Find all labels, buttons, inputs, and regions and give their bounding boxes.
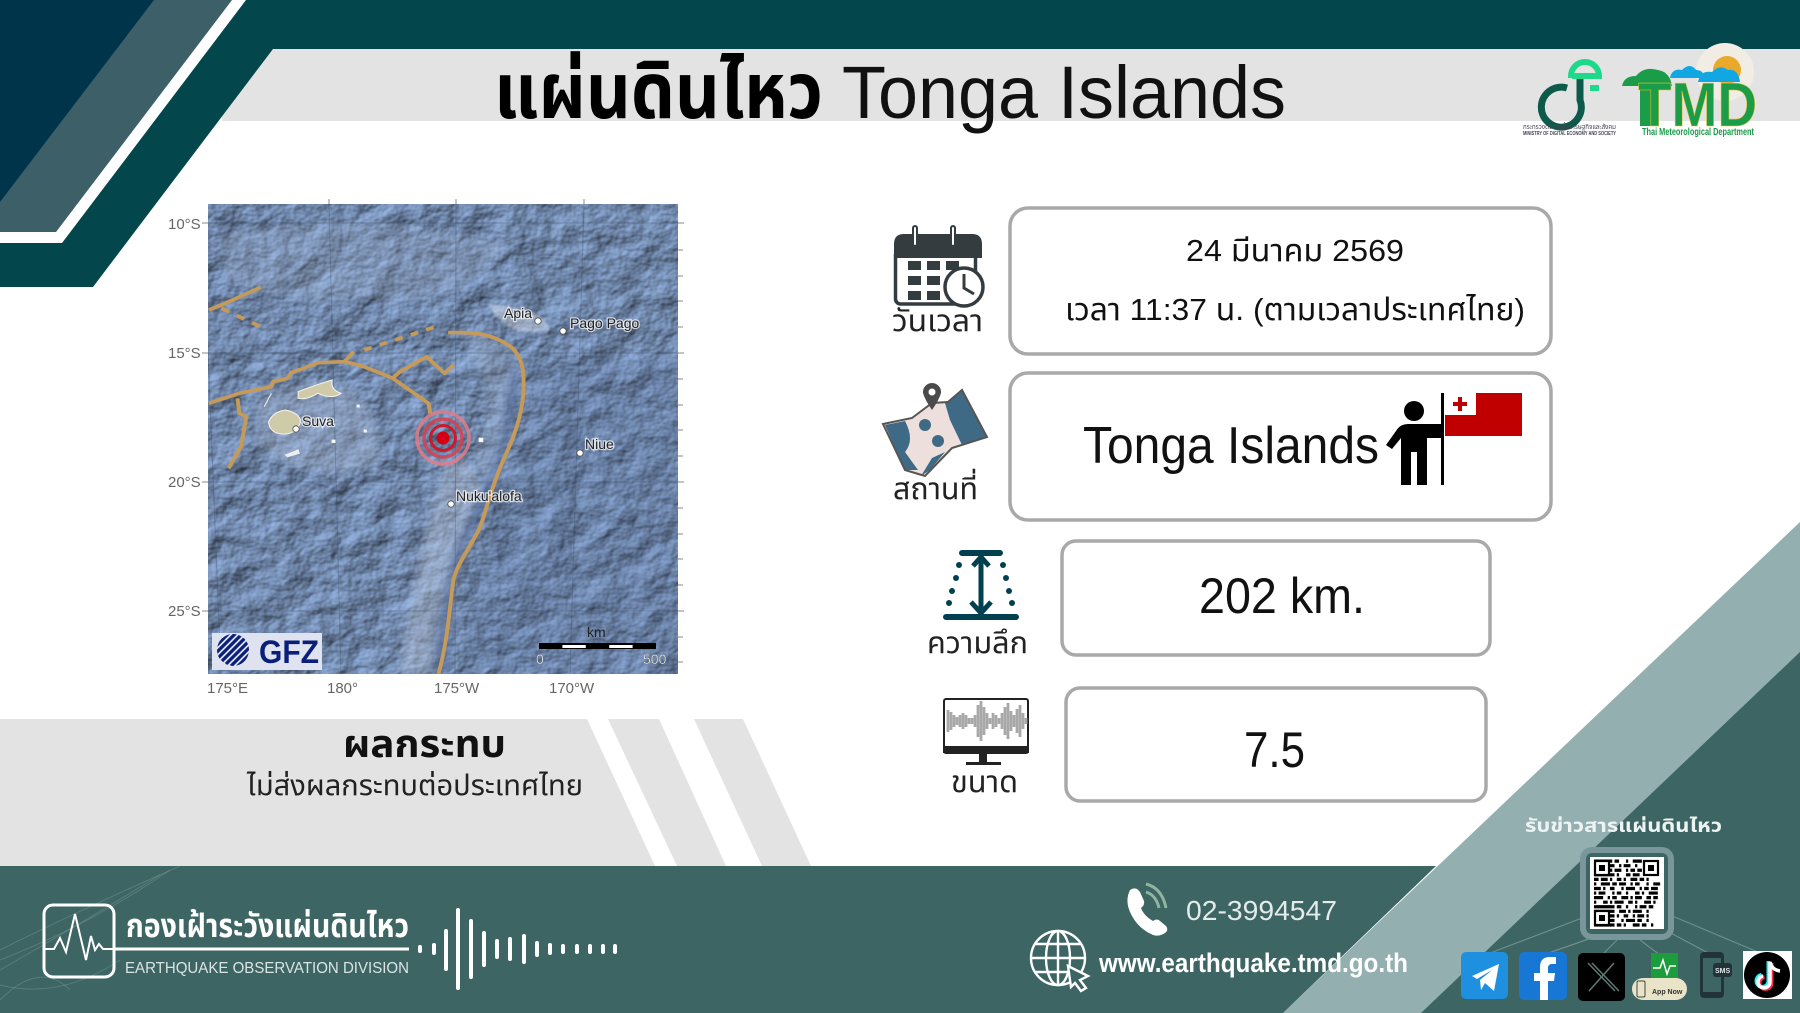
subscribe heading: รับข่าวสารแผ่นดินไหว xyxy=(1525,815,1722,837)
value box xyxy=(1066,688,1486,801)
impact text: ไม่ส่งผลกระทบต่อประเทศไทย xyxy=(246,770,583,802)
contact: phone: 02-3994547 xyxy=(1186,895,1337,926)
label: ขนาด xyxy=(951,766,1018,799)
map scale bar: km xyxy=(587,624,606,640)
icon: folded map with pin xyxy=(883,383,987,476)
city markers and names: Nuku'alofa xyxy=(456,488,522,504)
earthquake map xyxy=(168,199,684,697)
sound wave bars xyxy=(420,910,615,988)
latitude and longitude axis labels: 10°S xyxy=(168,216,201,233)
contact: website xyxy=(1031,931,1408,991)
seismograph icon xyxy=(44,905,114,977)
value box xyxy=(1062,541,1490,655)
map scale bar: 0 xyxy=(536,651,544,667)
QR code xyxy=(1580,847,1674,940)
icon: Facebook xyxy=(1519,952,1567,1000)
icon: phone xyxy=(1127,888,1167,936)
row: date and time: 24 มีนาคม 2569 xyxy=(1186,233,1404,268)
icon: earthquake app xyxy=(1632,953,1687,1000)
city markers and names: Pago Pago xyxy=(570,315,639,331)
icon: X xyxy=(1578,953,1625,1001)
city markers and names: Niue xyxy=(585,436,614,452)
right diagonal background shapes xyxy=(0,522,1800,1013)
QR finder squares xyxy=(1595,861,1658,925)
map scale bar xyxy=(536,624,667,667)
map scale bar: 500 xyxy=(643,651,667,667)
title: Tonga Islands xyxy=(842,51,1286,134)
icon: calendar with clock xyxy=(894,228,983,306)
latitude and longitude axis labels: 170°W xyxy=(549,680,595,697)
logo: ministry of digital economy: กระทรวงดิจิทัลเพื่อเศรษฐกิจและสังคม xyxy=(1523,121,1616,131)
icon: person with Tonga flag xyxy=(1386,393,1522,485)
icon: Telegram xyxy=(1461,952,1508,999)
division name: กองเฝ้าระวังแผ่นดินไหว xyxy=(126,907,409,944)
icon: depth arrow xyxy=(946,553,1016,617)
row: depth xyxy=(927,541,1490,660)
icon: SMS phone xyxy=(1700,952,1732,998)
logo: Thai Meteorological Department: Thai Meteorological Department xyxy=(1642,127,1754,138)
city markers and names xyxy=(293,305,639,507)
map frame ticks xyxy=(202,199,684,662)
latitude and longitude axis labels xyxy=(168,216,595,697)
latitude and longitude axis labels: 180° xyxy=(327,680,358,697)
latitude and longitude axis labels: 175°W xyxy=(434,680,480,697)
footer faint wave mesh xyxy=(0,866,180,1000)
latitude and longitude axis labels: 15°S xyxy=(168,345,201,362)
row: magnitude: 7.5 xyxy=(1244,722,1305,778)
logo: ministry of digital economy xyxy=(1523,62,1617,137)
logo: Thai Meteorological Department: TMD xyxy=(1638,71,1757,140)
division logo: EARTHQUAKE OBSERVATION DIVISION xyxy=(125,960,409,977)
value box xyxy=(1010,373,1551,520)
impact text: ผลกระทบ xyxy=(343,724,506,766)
icon: monitor with seismogram xyxy=(943,699,1029,765)
GFZ logo xyxy=(212,633,322,670)
header: dark teal band and slanted block xyxy=(0,0,1800,287)
icon: globe with cursor xyxy=(1031,931,1088,991)
logo: Thai Meteorological Department xyxy=(1622,43,1757,140)
label: ความลึก xyxy=(927,627,1028,660)
latitude and longitude axis labels: 20°S xyxy=(168,474,201,491)
islands xyxy=(264,380,483,457)
icon: TikTok xyxy=(1743,951,1792,999)
row: magnitude xyxy=(943,688,1486,801)
row: date and time xyxy=(892,208,1551,354)
contact: website: www.earthquake.tmd.go.th xyxy=(1098,948,1408,978)
GFZ logo: GFZ xyxy=(259,634,319,670)
icon: earthquake app: App Now xyxy=(1652,989,1683,996)
plate boundaries xyxy=(209,287,524,674)
label: วันเวลา xyxy=(892,305,983,338)
division logo xyxy=(44,905,615,988)
map base with hillshade relief xyxy=(208,204,678,674)
value box xyxy=(1010,208,1551,354)
connector lines from QR to channels xyxy=(1485,915,1765,955)
latitude and longitude axis labels: 175°E xyxy=(207,680,248,697)
city markers and names: Suva xyxy=(302,413,334,429)
title: แผ่นดินไหว xyxy=(494,47,823,135)
title xyxy=(494,47,1286,135)
epicenter marker xyxy=(417,412,469,464)
contact: phone xyxy=(1127,884,1337,936)
row: depth: 202 km. xyxy=(1199,568,1365,624)
label: สถานที่ xyxy=(893,468,978,506)
row: location: Tonga Islands xyxy=(1083,417,1379,475)
logo: ministry of digital economy: MINISTRY OF DIGITAL ECONOMY AND SOCIETY xyxy=(1523,131,1617,137)
row: date and time: เวลา 11:37 น. (ตามเวลาประเทศไทย) xyxy=(1065,292,1525,327)
row: location xyxy=(883,373,1551,520)
latitude and longitude axis labels: 25°S xyxy=(168,603,201,620)
impact panel background xyxy=(0,719,811,866)
graticule xyxy=(202,204,678,674)
impact text xyxy=(246,724,583,802)
icon: SMS phone: SMS xyxy=(1715,968,1730,975)
city markers and names: Apia xyxy=(504,305,532,321)
